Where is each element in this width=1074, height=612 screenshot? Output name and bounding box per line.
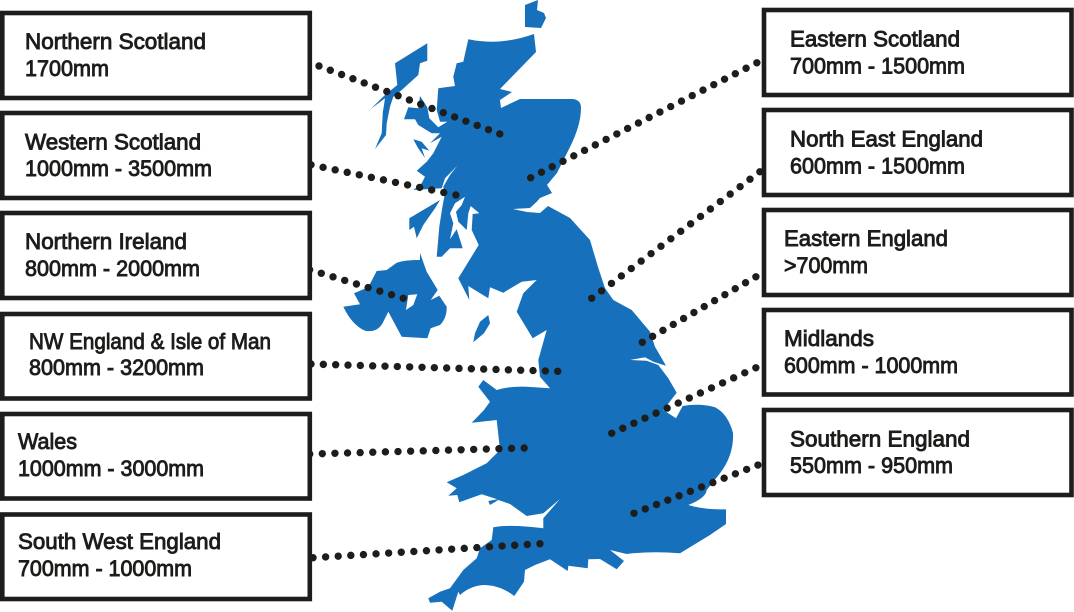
label: Western Scotland: Western Scotland: [25, 129, 201, 154]
map: Inner Hebrides sliver: [413, 139, 429, 158]
connector: Eastern Scotland: [531, 63, 757, 178]
map: Outer Hebrides: [371, 43, 427, 149]
label: Eastern England: >700mm: [784, 253, 868, 278]
label: Midlands: 600mm - 1000mm: [784, 353, 958, 378]
label: Western Scotland: [2, 113, 310, 198]
label: Midlands: Midlands: [784, 326, 874, 351]
label: Wales: Wales: [18, 429, 77, 454]
map: Isle of Man: [473, 315, 490, 342]
map of the UK: [343, 0, 733, 611]
label: North East England: 600mm - 1500mm: [790, 153, 965, 178]
connector: Midlands: [612, 368, 756, 433]
connector: South West England: [313, 544, 540, 558]
connector: Southern England: [634, 465, 758, 513]
label: NW England and Isle of Man: 800mm - 3200mm: [29, 355, 204, 380]
dotted connectors: [310, 63, 760, 558]
connector: NW England: [311, 364, 558, 371]
label: Northern Ireland: [2, 213, 310, 298]
label: Midlands: [764, 310, 1072, 394]
label: Eastern England: Eastern England: [784, 226, 948, 251]
label: NW England and Isle of Man: [2, 314, 310, 398]
label: Northern Scotland: 1700mm: [25, 56, 109, 81]
label: Western Scotland: 1000mm - 3500mm: [25, 156, 212, 181]
label: Northern Scotland: Northern Scotland: [25, 29, 206, 54]
label: Southern England: [764, 410, 1072, 495]
label: South West England: 700mm - 1000mm: [18, 556, 192, 581]
label: Eastern Scotland: [764, 10, 1072, 95]
connector: Northern Ireland: [310, 270, 403, 298]
label: Eastern England: [764, 210, 1072, 295]
label: Wales: 1000mm - 3000mm: [18, 456, 204, 481]
map: Great Britain mainland: [404, 34, 733, 611]
label: Southern England: 550mm - 950mm: [790, 453, 953, 478]
map: Northern Ireland: [343, 253, 447, 338]
label: North East England: North East England: [790, 127, 983, 152]
connector: Wales: [310, 448, 524, 454]
label: North East England: [764, 110, 1072, 195]
label: Northern Ireland: 800mm - 2000mm: [25, 256, 200, 281]
label: Eastern Scotland: 700mm - 1500mm: [790, 53, 965, 78]
connector: Western Scotland: [311, 165, 456, 195]
label: Northern Scotland: [2, 13, 310, 98]
label: Wales: [2, 414, 310, 498]
label: Eastern Scotland: Eastern Scotland: [790, 27, 960, 52]
connector: Eastern England: [642, 277, 756, 342]
label: South West England: South West England: [18, 529, 221, 554]
connector: North East England: [592, 172, 760, 298]
connector: Northern Scotland: [319, 66, 500, 134]
label: Southern England: Southern England: [790, 426, 970, 452]
map: Jura and Islay: [409, 200, 440, 238]
label: South West England: [2, 514, 310, 599]
label: Northern Ireland: Northern Ireland: [25, 229, 187, 254]
map: Shetland: [525, 0, 546, 28]
label: NW England and Isle of Man: NW England & Isle of Man: [29, 329, 271, 354]
